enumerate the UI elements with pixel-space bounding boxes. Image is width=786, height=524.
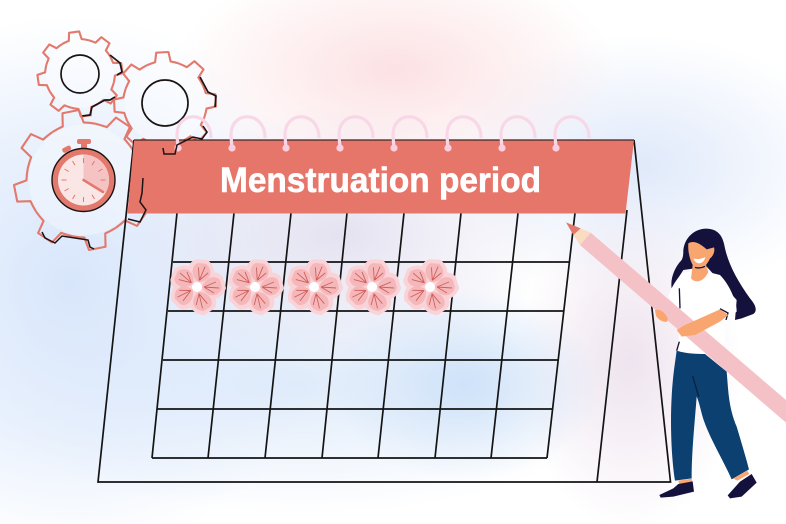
shoes <box>659 474 757 498</box>
pencil <box>566 222 786 423</box>
neck and face <box>688 242 714 281</box>
calendar header band <box>128 140 634 214</box>
shirt <box>668 271 737 354</box>
title: Menstruation period <box>220 161 541 200</box>
chin line <box>677 266 728 351</box>
trousers <box>671 351 749 481</box>
icon: stopwatch <box>52 139 115 212</box>
gear: large top right <box>112 50 218 156</box>
spiral rings <box>174 117 589 152</box>
hair <box>671 229 756 320</box>
woman holding pencil <box>566 222 786 498</box>
gear strokes over header <box>42 126 207 249</box>
gear: small top <box>32 26 128 122</box>
header top edge <box>134 139 634 141</box>
gear: stopwatch gear <box>2 98 166 262</box>
ankles <box>678 471 749 484</box>
trouser crease <box>693 376 699 397</box>
hands and arm <box>655 309 728 337</box>
smile <box>693 257 705 263</box>
calendar body outline <box>98 140 670 482</box>
flowers marking period days <box>168 257 457 316</box>
calendar grid <box>152 213 575 458</box>
